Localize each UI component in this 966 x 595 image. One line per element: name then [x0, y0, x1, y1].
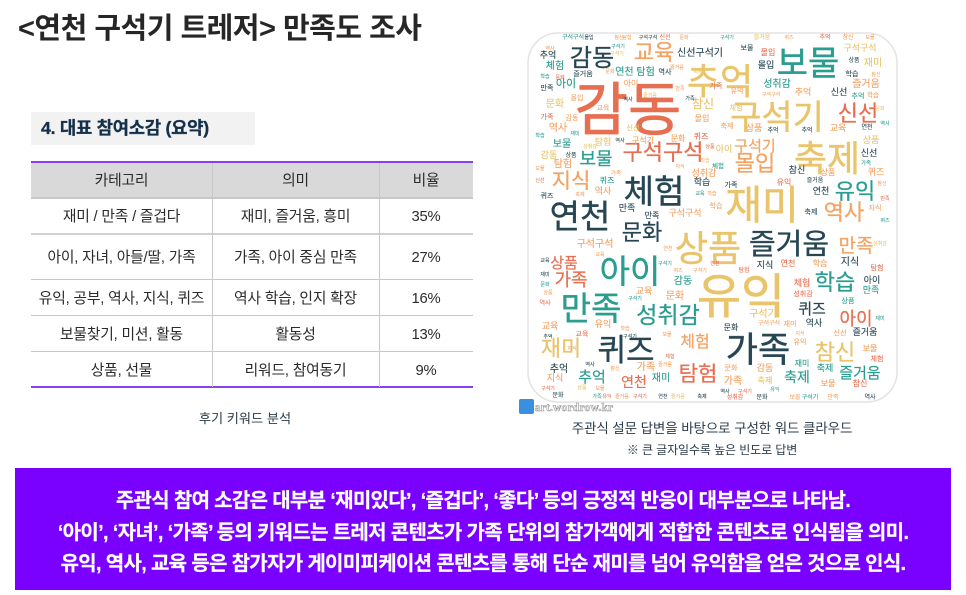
word cloud words: 신선	[861, 148, 877, 158]
word cloud words: 역사	[720, 388, 730, 395]
word cloud words: 축제	[697, 393, 707, 400]
word cloud words: 몰입	[735, 151, 775, 176]
table: keyword summary: 리워드, 참여동기	[245, 363, 346, 379]
word cloud words: 즐거움	[658, 361, 672, 368]
word cloud words: 체험	[730, 104, 742, 112]
word cloud words: 교육	[597, 104, 610, 112]
word cloud words: 탐험	[871, 264, 883, 272]
word cloud words: 성취감	[793, 289, 813, 298]
word cloud words: 성취감	[727, 393, 744, 401]
word cloud words: 성취감	[692, 167, 716, 178]
word cloud words: 참신	[871, 71, 881, 78]
word cloud words: 참신	[692, 97, 714, 111]
word cloud words: 문화	[679, 35, 689, 41]
word cloud words: 가족	[554, 270, 588, 290]
word cloud words: 재미	[541, 336, 581, 361]
word cloud words: 연천	[621, 374, 647, 390]
word cloud words: 구석기	[730, 99, 824, 137]
word cloud words: 교육	[542, 321, 558, 331]
word cloud words: 구석기	[720, 34, 734, 41]
word cloud words: 축제	[784, 369, 810, 385]
word cloud words: 교육	[576, 330, 589, 338]
word cloud words: 아이	[716, 144, 732, 154]
word cloud words: 만족	[839, 235, 873, 257]
word cloud words: 축제	[575, 191, 585, 198]
word cloud words: 보물	[789, 394, 801, 401]
word cloud words: 상품	[543, 289, 553, 296]
word cloud words: 가족	[592, 393, 602, 400]
table: keyword summary: 재미 / 만족 / 즐겁다	[63, 209, 180, 225]
word cloud words: 구석구석	[758, 319, 780, 327]
table: keyword summary: 35%	[411, 209, 440, 225]
word cloud words: 구석기	[749, 308, 777, 320]
word cloud words: 아이	[864, 275, 880, 285]
summary banner: ‘아이’, ‘자녀’, ‘가족’ 등의 키워드는 트레저 콘텐츠가 가족 단위의 참가객에게 적합한 콘텐츠로 인식됨을 의미.	[58, 522, 908, 544]
word cloud words: 신선	[535, 177, 545, 184]
word cloud words: 만족	[827, 393, 839, 401]
word cloud words: 지식	[547, 373, 563, 383]
word cloud words: 상품	[550, 255, 578, 272]
word cloud words: 참신	[877, 180, 887, 187]
word cloud words: 구석구석	[843, 43, 877, 53]
word cloud words: 학습	[620, 325, 630, 332]
word cloud words: 학습	[813, 258, 827, 268]
word cloud words: 구석기	[738, 388, 752, 395]
word cloud words: 퀴즈	[673, 267, 683, 274]
word cloud words: 유익	[697, 271, 785, 324]
table: keyword summary: 보물찾기, 미션, 활동	[60, 327, 183, 343]
word cloud words: 문화	[552, 392, 564, 399]
word cloud words: 연천 탐험	[615, 66, 655, 78]
word cloud words: 구석기	[610, 50, 624, 57]
word cloud words: 퀴즈	[784, 34, 794, 41]
word cloud words: 교육	[695, 191, 705, 197]
word cloud words: 만족	[675, 85, 685, 92]
word cloud words: 보물	[553, 138, 571, 150]
word cloud words: 재미	[795, 359, 809, 368]
word cloud words: 역사	[595, 186, 612, 196]
table: keyword summary: 16%	[411, 291, 440, 307]
word cloud words: 체험	[680, 333, 710, 351]
word cloud words: 역사	[615, 137, 625, 144]
word cloud words: 문화	[622, 220, 662, 245]
word cloud words: 학습	[846, 69, 859, 78]
word cloud words: 교육	[595, 252, 605, 258]
word cloud words: 보물	[595, 386, 605, 392]
word cloud words: 연천	[861, 123, 873, 131]
word cloud words: 참신	[853, 378, 867, 388]
word cloud words: 체험	[546, 60, 564, 72]
word cloud words: 감동	[541, 149, 557, 160]
word cloud words: 감동	[566, 114, 579, 122]
word cloud words: 상품	[842, 296, 855, 305]
word cloud words: 몰입	[695, 114, 709, 123]
word cloud words: 문화	[666, 290, 684, 302]
logo text: art.wordrow.kr	[535, 402, 613, 414]
word cloud words: 축제	[817, 363, 833, 373]
word cloud words: 역사	[659, 67, 672, 76]
word cloud words: 만족	[619, 203, 635, 213]
word cloud words: 역사	[623, 96, 633, 103]
word cloud words: 재미	[540, 271, 550, 278]
table: keyword summary: 의미	[282, 173, 309, 189]
word cloud words: 구석구석	[762, 91, 780, 98]
word cloud words: 유익	[595, 318, 611, 329]
word cloud words: 역사	[545, 45, 555, 52]
word cloud words: 추억	[550, 363, 568, 375]
word cloud words: 즐거움	[754, 33, 771, 41]
word cloud note: ※ 큰 글자일수록 높은 빈도로 답변	[627, 443, 797, 457]
word cloud words: 축제	[794, 138, 860, 179]
word cloud words: 체험	[624, 173, 684, 210]
word cloud words: 성취감	[763, 78, 791, 90]
word cloud words: 문화	[546, 98, 564, 110]
word cloud words: 학습	[535, 132, 545, 139]
word cloud words: 연천	[781, 258, 795, 268]
word cloud words: 가족	[726, 331, 790, 370]
word cloud words: 지식	[869, 203, 881, 212]
word cloud words: 아이	[600, 253, 660, 290]
small filler words: 구석구석	[562, 33, 584, 41]
word cloud words: 지식	[675, 163, 685, 170]
word cloud words: 유익	[777, 177, 791, 187]
word cloud words: 축제	[721, 121, 733, 130]
word cloud words: 참신	[789, 165, 805, 175]
word cloud words: 즐거움	[839, 365, 881, 382]
word cloud words: 역사	[549, 122, 567, 134]
table: keyword summary: 상품, 선물	[91, 363, 152, 379]
word cloud words: 문화	[725, 364, 738, 372]
word cloud words: 추억	[578, 369, 606, 386]
word cloud words: 지식	[795, 330, 805, 337]
word cloud words: 추억	[852, 92, 864, 100]
word cloud words: 퀴즈	[600, 175, 614, 185]
word cloud words: 학습	[694, 177, 710, 187]
word cloud words: 역사	[806, 318, 823, 328]
word cloud words: 구석기	[541, 385, 555, 392]
word cloud words: 역사	[880, 120, 890, 127]
word cloud words: 학습	[707, 190, 717, 197]
word cloud caption: 주관식 설문 답변을 바탕으로 구성한 워드 클라우드	[572, 421, 852, 436]
table: keyword summary: 활동성	[275, 327, 316, 343]
word cloud words: 문화	[724, 323, 739, 332]
word cloud words: 문화	[671, 134, 686, 143]
word cloud words: 재미	[875, 315, 885, 322]
word cloud words: 추억	[801, 126, 813, 134]
word cloud words: 즐거움	[643, 92, 657, 99]
word cloud words: 가족	[611, 169, 621, 177]
word cloud words: 교육	[830, 123, 846, 133]
word cloud words: 퀴즈	[880, 217, 890, 224]
word cloud words: 신선	[838, 101, 878, 126]
word cloud words: 상품	[821, 167, 835, 177]
word cloud words: 즐거움	[749, 229, 829, 261]
word cloud words: 상품	[675, 228, 741, 269]
word cloud words: 유익	[835, 179, 875, 204]
word cloud words: 재미	[570, 130, 580, 137]
section heading	[31, 112, 255, 145]
word cloud words: 탐험	[738, 266, 750, 274]
word cloud words: 보물	[865, 35, 875, 41]
table caption: 후기 키워드 분석	[199, 411, 291, 426]
word cloud words: 체험	[794, 278, 810, 288]
word cloud words: 감동	[570, 45, 614, 72]
word cloud words: 역사	[539, 299, 551, 307]
word cloud words: 아이	[556, 77, 576, 90]
word cloud words: 유익	[794, 338, 806, 346]
word cloud words: 가족	[685, 95, 695, 102]
word cloud words: 문화	[756, 394, 768, 401]
word cloud words: 상품	[848, 56, 860, 64]
word cloud words: 보물	[821, 379, 835, 388]
word cloud words: 성취감	[636, 302, 700, 328]
word cloud words: 학습	[815, 270, 855, 295]
word cloud words: 역사	[585, 361, 595, 368]
word cloud words: 만족	[880, 195, 890, 202]
word cloud words: 신선	[834, 328, 846, 337]
word cloud words: 보물	[777, 45, 839, 83]
word cloud words: 참신	[610, 365, 620, 372]
word cloud words: 학습	[867, 90, 879, 99]
word cloud words: 퀴즈	[694, 131, 708, 141]
table: keyword summary: 아이, 자녀, 아들/딸, 가족	[47, 250, 196, 266]
word cloud words: 아이	[624, 78, 638, 88]
word cloud words: 교육	[636, 286, 652, 296]
word cloud words: 퀴즈	[798, 301, 826, 318]
word cloud words: 축제	[758, 376, 772, 385]
word cloud words: 교육	[540, 258, 550, 264]
word cloud words: 재미	[784, 319, 796, 328]
word cloud words: 신선	[831, 87, 847, 97]
word cloud words: 추억	[819, 33, 831, 41]
word cloud words: 구석구석	[639, 34, 657, 41]
word cloud words: 만족	[561, 290, 621, 327]
table: keyword summary: 비율	[413, 173, 439, 189]
word cloud words: 즐거움	[807, 176, 824, 184]
word cloud words: 감동	[757, 362, 773, 373]
word cloud words: 구석기	[632, 135, 654, 145]
word cloud words: 재미	[864, 57, 882, 69]
table: keyword summary: 가족, 아이 중심 만족	[234, 250, 357, 266]
word cloud words: 체험	[665, 353, 675, 360]
word cloud words: 만족	[863, 285, 879, 295]
word cloud words: 참신	[614, 34, 624, 41]
table: keyword summary: 13%	[411, 327, 440, 343]
word cloud words: 가족	[724, 375, 742, 387]
word cloud words: 지식	[841, 256, 859, 268]
word cloud words: 구석기	[693, 267, 707, 274]
word cloud words: 탐험	[622, 34, 632, 41]
logo icon	[519, 399, 534, 414]
word cloud words: 학습	[700, 157, 710, 164]
word cloud words: 퀴즈	[868, 167, 884, 177]
word cloud words: 추억	[543, 333, 553, 340]
word cloud words: 연천	[813, 186, 829, 196]
word cloud words: 역사	[824, 200, 864, 225]
word cloud words: 축제	[805, 207, 817, 216]
word cloud words: 신선	[627, 123, 639, 132]
word cloud words: 탐험	[595, 136, 611, 147]
title: <연천 구석기 트레저> 만족도 조사	[18, 13, 421, 45]
word cloud words: 즐거움	[670, 64, 684, 71]
word cloud words: 보물	[535, 166, 545, 172]
word cloud words: 가족	[725, 180, 738, 189]
word cloud words: 문화	[555, 75, 565, 81]
word cloud words: 몰입	[761, 48, 775, 57]
word cloud words: 보물	[579, 149, 613, 169]
word cloud words: 퀴즈	[597, 333, 655, 368]
word cloud words: 퀴즈	[541, 191, 554, 200]
word cloud words: 성취감	[873, 240, 887, 247]
word cloud words: 몰입	[584, 34, 594, 41]
word cloud words: 보물	[662, 332, 672, 338]
word cloud words: 탐험	[554, 158, 572, 170]
word cloud words: 즐거움	[853, 327, 877, 337]
word cloud words: 구석기	[611, 43, 625, 50]
word cloud words: 성취감	[583, 143, 597, 150]
word cloud words: 구석구석	[577, 238, 613, 250]
word cloud	[519, 32, 898, 414]
word cloud words: 체험	[712, 162, 724, 170]
word cloud words: 문화	[540, 282, 550, 288]
word cloud words: 구석기	[633, 393, 647, 400]
summary banner: 주관식 참여 소감은 대부분 ‘재미있다’, ‘즐겁다’, ‘좋다’ 등의 긍정적 반응이 대부분으로 나타남.	[116, 490, 850, 512]
word cloud words: 만족	[645, 211, 659, 220]
word cloud words: 참신	[842, 33, 854, 41]
word cloud words: 유익	[731, 87, 743, 95]
word cloud words: 상품	[863, 135, 879, 145]
word cloud words: 몰입	[758, 59, 774, 70]
word cloud words: 구석기	[802, 393, 818, 401]
word cloud words: 추억	[687, 61, 753, 102]
word cloud words: 연천	[658, 393, 668, 400]
table: keyword summary: 9%	[416, 363, 436, 379]
summary banner	[15, 468, 951, 590]
summary banner: 유익, 역사, 교육 등은 참가자가 게이미피케이션 콘텐츠를 통해 단순 재미를 넘어 유익함을 얻은 것으로 인식.	[61, 553, 905, 575]
word cloud words: 구석기	[623, 333, 637, 340]
table: keyword summary: 역사 학습, 인지 확장	[234, 291, 357, 307]
table: keyword summary: 재미, 즐거움, 흥미	[241, 209, 350, 225]
word cloud words: 아이	[839, 309, 873, 329]
word cloud words: 구석기	[734, 138, 776, 155]
word cloud words	[535, 33, 890, 401]
word cloud words: 가족	[861, 159, 871, 167]
word cloud words: 연천	[663, 245, 673, 252]
word cloud words: 체험	[871, 355, 883, 363]
word cloud words: 즐거움	[852, 78, 880, 90]
word cloud words: 유익	[770, 386, 780, 393]
word cloud words: 만족	[541, 83, 554, 92]
word cloud words: 가족	[541, 112, 554, 121]
table: keyword summary: 27%	[411, 250, 440, 266]
word cloud words: 상품	[565, 151, 577, 159]
table: keyword summary	[31, 161, 473, 388]
word cloud words: 상품	[577, 384, 587, 391]
word cloud words: 역사	[864, 393, 876, 401]
word cloud words: 문화	[875, 106, 885, 112]
word cloud words: 몰입	[571, 94, 583, 102]
word cloud words: 축제	[693, 68, 703, 75]
word cloud words: 추억	[540, 49, 556, 60]
word cloud words: 감동	[674, 275, 692, 287]
word cloud words: 즐거움	[615, 393, 629, 400]
word cloud words: 구석기	[628, 295, 642, 302]
word cloud words: 재미	[652, 372, 670, 384]
word cloud words: 학습	[540, 73, 550, 80]
word cloud words: 참신	[815, 340, 855, 365]
section heading: 4. 대표 참여소감 (요약)	[41, 118, 209, 138]
word cloud words: 보물	[863, 344, 877, 353]
word cloud words: 상품	[746, 123, 762, 133]
word cloud words: 지식	[567, 345, 577, 352]
word cloud words: 지식	[757, 260, 773, 270]
word cloud words: 상품	[705, 143, 715, 150]
word cloud words: 연천	[710, 260, 720, 267]
word cloud words: 연천	[550, 198, 610, 235]
word cloud words: 신선구석기	[677, 47, 723, 59]
word cloud words: 탐험	[679, 363, 717, 386]
word cloud words: 즐거움	[671, 393, 685, 400]
word cloud words: 추억	[767, 126, 779, 134]
word cloud words: 재미	[725, 184, 799, 228]
word cloud words: 감동	[575, 78, 681, 143]
word cloud words: 신선	[659, 33, 671, 41]
word cloud words: 지식	[552, 170, 590, 193]
word cloud words: 구석기	[658, 260, 672, 267]
word cloud words: 구석구석	[623, 140, 703, 165]
word cloud words: 문화	[605, 69, 615, 75]
word cloud words: 추억	[795, 86, 811, 97]
word cloud words: 보물	[741, 44, 754, 52]
word cloud words: 가족	[710, 81, 723, 90]
word cloud words: 가족	[637, 361, 655, 373]
word cloud words: 학습	[710, 201, 723, 210]
word cloud words: 즐거움	[573, 69, 593, 78]
word cloud panel	[528, 33, 897, 402]
word cloud words: 교육	[634, 40, 674, 65]
table: keyword summary: 유익, 공부, 역사, 지식, 퀴즈	[39, 291, 204, 307]
table: keyword summary: 카테고리	[95, 173, 148, 189]
word cloud words: 구석구석	[668, 208, 702, 218]
word cloud words: 유익	[602, 393, 612, 400]
